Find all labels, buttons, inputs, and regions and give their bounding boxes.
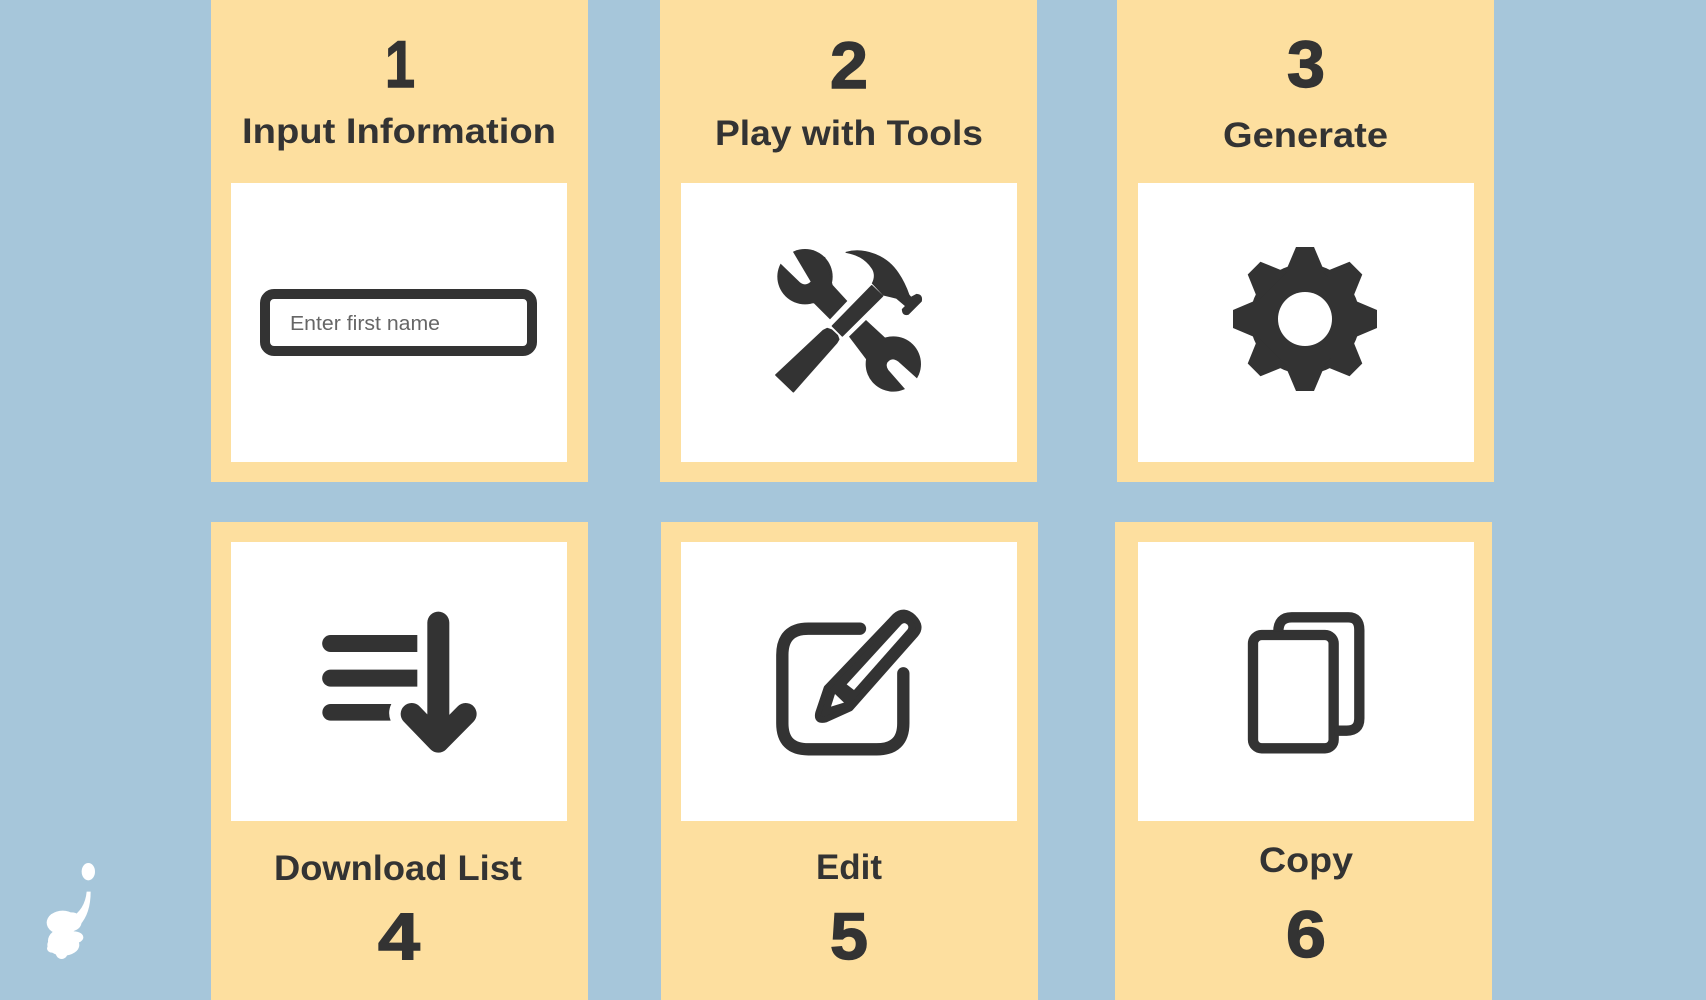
icon: wrench and hammer	[773, 244, 924, 397]
step number 5: 5	[830, 899, 868, 973]
white card: step 1	[231, 183, 567, 462]
step number 6: 6	[1286, 897, 1326, 971]
panel: step 2 play with tools	[660, 0, 1037, 482]
step number 4: 4	[378, 899, 420, 973]
white card: step 6	[1138, 542, 1474, 821]
heading: input information: Input Information	[242, 112, 556, 151]
white card: step 5	[681, 542, 1017, 821]
panel: step 5 edit	[661, 522, 1038, 1000]
step number 3: 3	[1287, 27, 1325, 101]
heading: copy: Copy	[1259, 841, 1354, 880]
icon: gear	[1233, 247, 1377, 391]
step number 1: 1	[385, 27, 415, 101]
heading: download list: Download List	[274, 849, 522, 888]
icon: download list	[322, 623, 466, 742]
icon: input field: Enter first name	[290, 313, 440, 335]
icon: copy documents	[1253, 617, 1359, 748]
icon: input field	[265, 294, 532, 351]
white card: step 4	[231, 542, 567, 821]
icon: elephant with balloon logo	[47, 863, 95, 959]
white card: step 2	[681, 183, 1017, 462]
heading: generate: Generate	[1223, 116, 1388, 155]
panel: step 4 download list	[211, 522, 588, 1000]
panel: step 1 input information	[211, 0, 588, 482]
panel: step 6 copy	[1115, 522, 1492, 1000]
white card: step 3	[1138, 183, 1474, 462]
panel: step 3 generate	[1117, 0, 1494, 482]
icon: edit pencil and square	[782, 613, 919, 749]
heading: edit: Edit	[816, 848, 882, 887]
step number 2: 2	[830, 28, 868, 102]
heading: play with tools: Play with Tools	[715, 114, 983, 153]
